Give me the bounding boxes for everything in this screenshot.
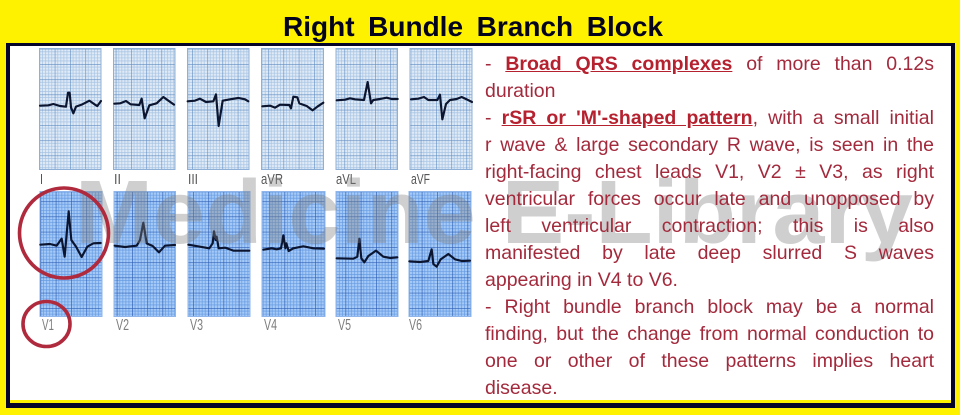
- lead labels: V2: [116, 317, 129, 334]
- lead labels: V1: [42, 317, 54, 334]
- text block: description: duration: [485, 80, 555, 102]
- text block: description: - Right bundle branch block may be a normal: [485, 296, 934, 318]
- callout: V1 label circle: [23, 302, 70, 346]
- lead labels: V6: [409, 317, 422, 334]
- lead labels: [40, 171, 430, 334]
- text block: description: left ventricular contraction; this is also: [485, 215, 934, 237]
- text block: description: right-facing chest leads V1, V2 ± V3, as right: [485, 161, 934, 183]
- lead labels: I: [40, 171, 43, 188]
- text block: description: - Broad QRS complexes of more than 0.12s: [485, 53, 934, 75]
- lead labels: aVL: [336, 171, 356, 188]
- text block: description: ventricular forces occur late and unopposed by: [485, 188, 934, 210]
- text block: description: r wave & large secondary R wave, is seen in the: [485, 134, 934, 156]
- chest lead grids: [40, 192, 471, 316]
- text block: description: finding, but the change from normal conduction to: [485, 323, 934, 345]
- limb lead grids: [40, 48, 472, 170]
- lead labels: V3: [190, 317, 203, 334]
- limb lead traces: [40, 82, 472, 126]
- text block: description: manifested by late deep slurred S waves: [485, 242, 934, 264]
- chest lead traces: [40, 211, 470, 267]
- lead labels: V4: [264, 317, 277, 334]
- title: Right Bundle Branch Block: [283, 11, 663, 42]
- lead labels: III: [188, 171, 198, 188]
- lead labels: V5: [338, 317, 351, 334]
- text block: description: one or other of these patterns implies heart: [485, 350, 934, 372]
- text block: description: [485, 53, 934, 399]
- lead labels: aVF: [411, 171, 430, 188]
- callout: V1 trace circle: [20, 188, 108, 278]
- watermark: Medicine E-Library: [75, 163, 913, 263]
- lead labels: II: [114, 171, 121, 188]
- lead labels: aVR: [261, 171, 283, 188]
- text block: description: - rSR or 'M'-shaped pattern, with a small initial: [485, 107, 934, 129]
- text block: description: appearing in V4 to V6.: [485, 269, 678, 291]
- text block: description: disease.: [485, 377, 558, 399]
